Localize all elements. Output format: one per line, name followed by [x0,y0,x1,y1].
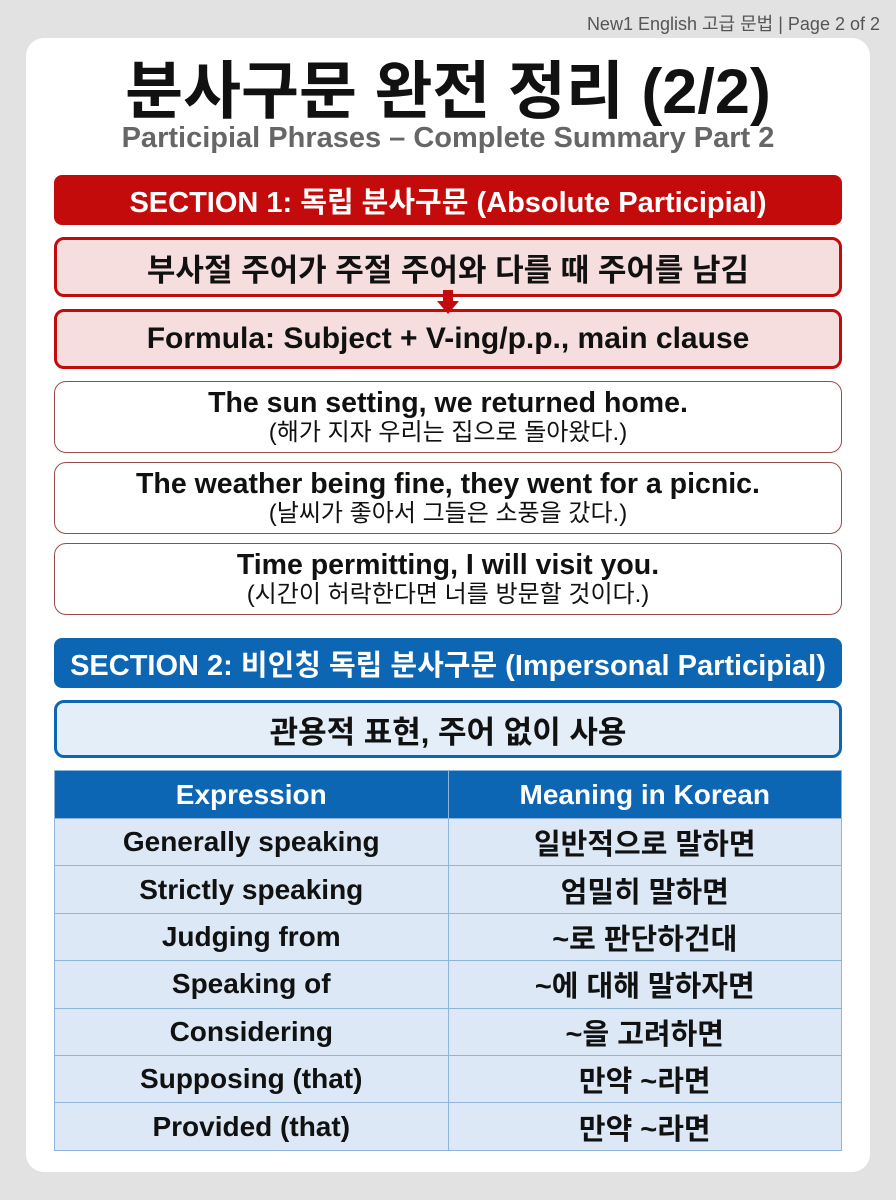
example 1: (해가 지자 우리는 집으로 돌아왔다.) [269,419,627,446]
expressions table: 만약 ~라면 [579,1114,711,1146]
example 1 [54,381,842,453]
section 1 header [54,175,842,225]
expressions table: 일반적으로 말하면 [534,829,756,861]
section 2 header [54,638,842,688]
definition box: 부사절 주어가 주절 주어와 다를 때 주어를 남김 [147,252,749,288]
header page label: New1 English 고급 문법 | Page 2 of 2 [587,14,880,34]
section 2 description: 관용적 표현, 주어 없이 사용 [270,714,626,750]
expressions table: Provided (that) [152,1111,350,1142]
expressions table: Considering [170,1016,333,1047]
expressions table: Generally speaking [123,826,380,857]
example 2: (날씨가 좋아서 그들은 소풍을 갔다.) [269,500,627,527]
example 3: (시간이 허락한다면 너를 방문할 것이다.) [247,581,649,608]
example 2: The weather being fine, they went for a picnic. [136,468,760,500]
example 3: Time permitting, I will visit you. [237,549,659,581]
expressions table: 엄밀히 말하면 [561,877,729,909]
expressions table: ~로 판단하건대 [552,924,737,956]
expressions table: Speaking of [172,968,331,999]
section 1 header: SECTION 1: 독립 분사구문 (Absolute Participial) [129,187,767,219]
formula box [54,309,842,369]
example 3 [54,543,842,615]
expressions table: ~을 고려하면 [566,1019,724,1051]
expressions table: Strictly speaking [139,874,363,905]
expressions table: Meaning in Korean [520,778,770,810]
formula box: Formula: Subject + V-ing/p.p., main clause [147,322,749,355]
expressions table: Supposing (that) [140,1063,362,1094]
expressions table: 만약 ~라면 [579,1066,711,1098]
definition box [54,237,842,297]
arrow [437,290,459,314]
expressions table: Expression [176,778,327,810]
subtitle: Participial Phrases – Complete Summary Part 2 [122,122,774,154]
title: 분사구문 완전 정리 (2/2) [125,56,771,126]
expressions table: ~에 대해 말하자면 [535,971,755,1003]
section 2 header: SECTION 2: 비인칭 독립 분사구문 (Impersonal Participial) [70,650,826,682]
example 1: The sun setting, we returned home. [208,387,688,419]
expressions table [54,770,842,1151]
expressions table: Judging from [162,921,341,952]
section 2 description [54,700,842,758]
example 2 [54,462,842,534]
